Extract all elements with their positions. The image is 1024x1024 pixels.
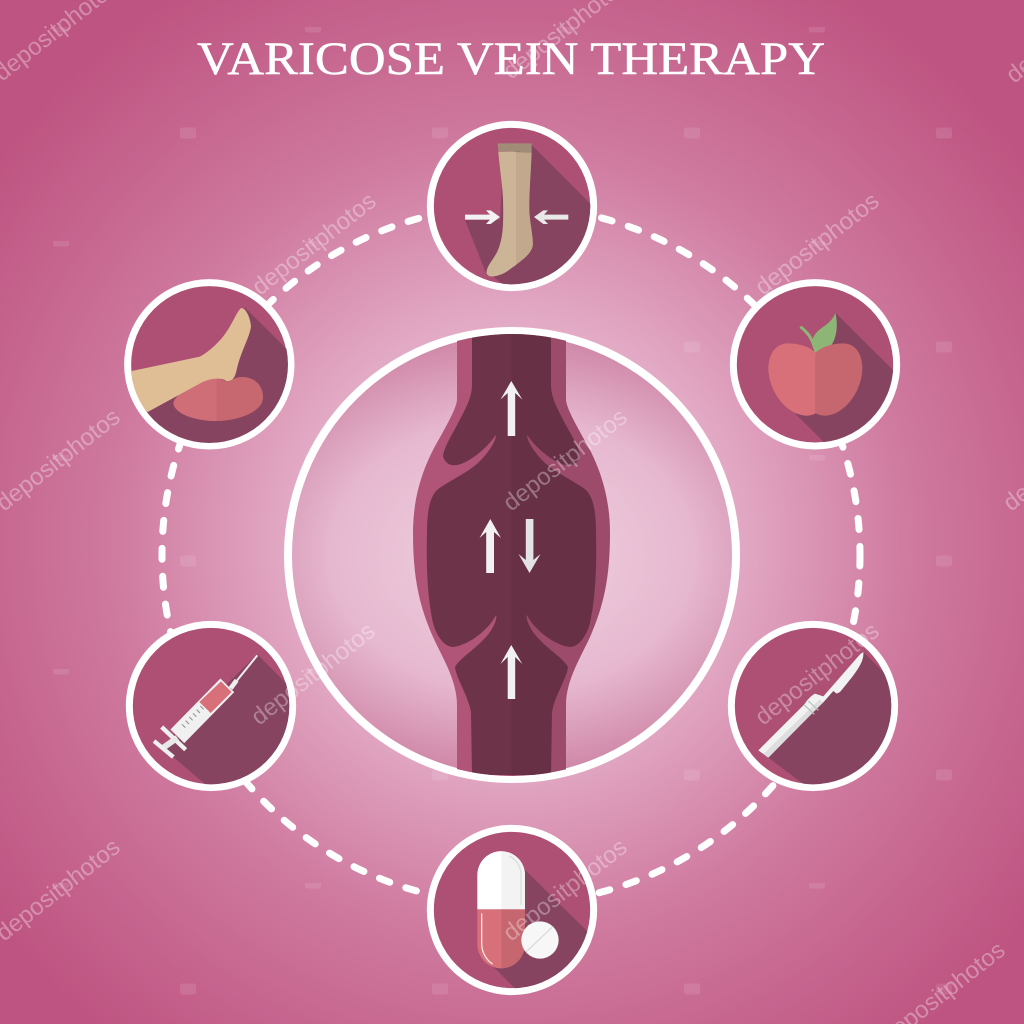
flow arrows [480,381,540,699]
medallion [129,624,293,788]
stocking [487,152,533,276]
leg and foot [127,308,251,415]
dashed ring connecting therapies [162,206,860,904]
medallion [430,828,594,992]
scalpel [758,652,863,758]
title: VARICOSE VEIN THERAPY [197,33,825,85]
therapy: medication capsule and tablet [426,824,598,996]
watermark text: depositphotos [246,617,380,731]
apple body [768,343,816,416]
vein illustration [413,330,610,780]
central vein panel [288,330,736,780]
syringe [154,655,257,757]
watermark text: depositphotos [247,187,381,301]
tablet [521,921,559,959]
watermark text: depositphotos [750,187,884,301]
medallion [733,283,897,446]
compression arrows [465,210,500,224]
medallion [430,124,594,288]
pillow [173,377,263,421]
stem and leaf [800,327,814,345]
panel disc [288,331,736,779]
medallion [731,624,895,788]
watermark text: depositphotos [498,833,632,947]
therapy: healthy diet apple [730,279,900,450]
watermark text: depositphotos [750,617,884,731]
therapy: compression stocking [426,120,598,292]
therapy: injection syringe [126,620,296,792]
therapy: surgery scalpel [728,620,898,792]
therapy: elevated foot on pillow [124,279,294,450]
medallion [128,283,291,446]
capsule [477,851,525,909]
watermark text: depositphotos [498,403,632,517]
